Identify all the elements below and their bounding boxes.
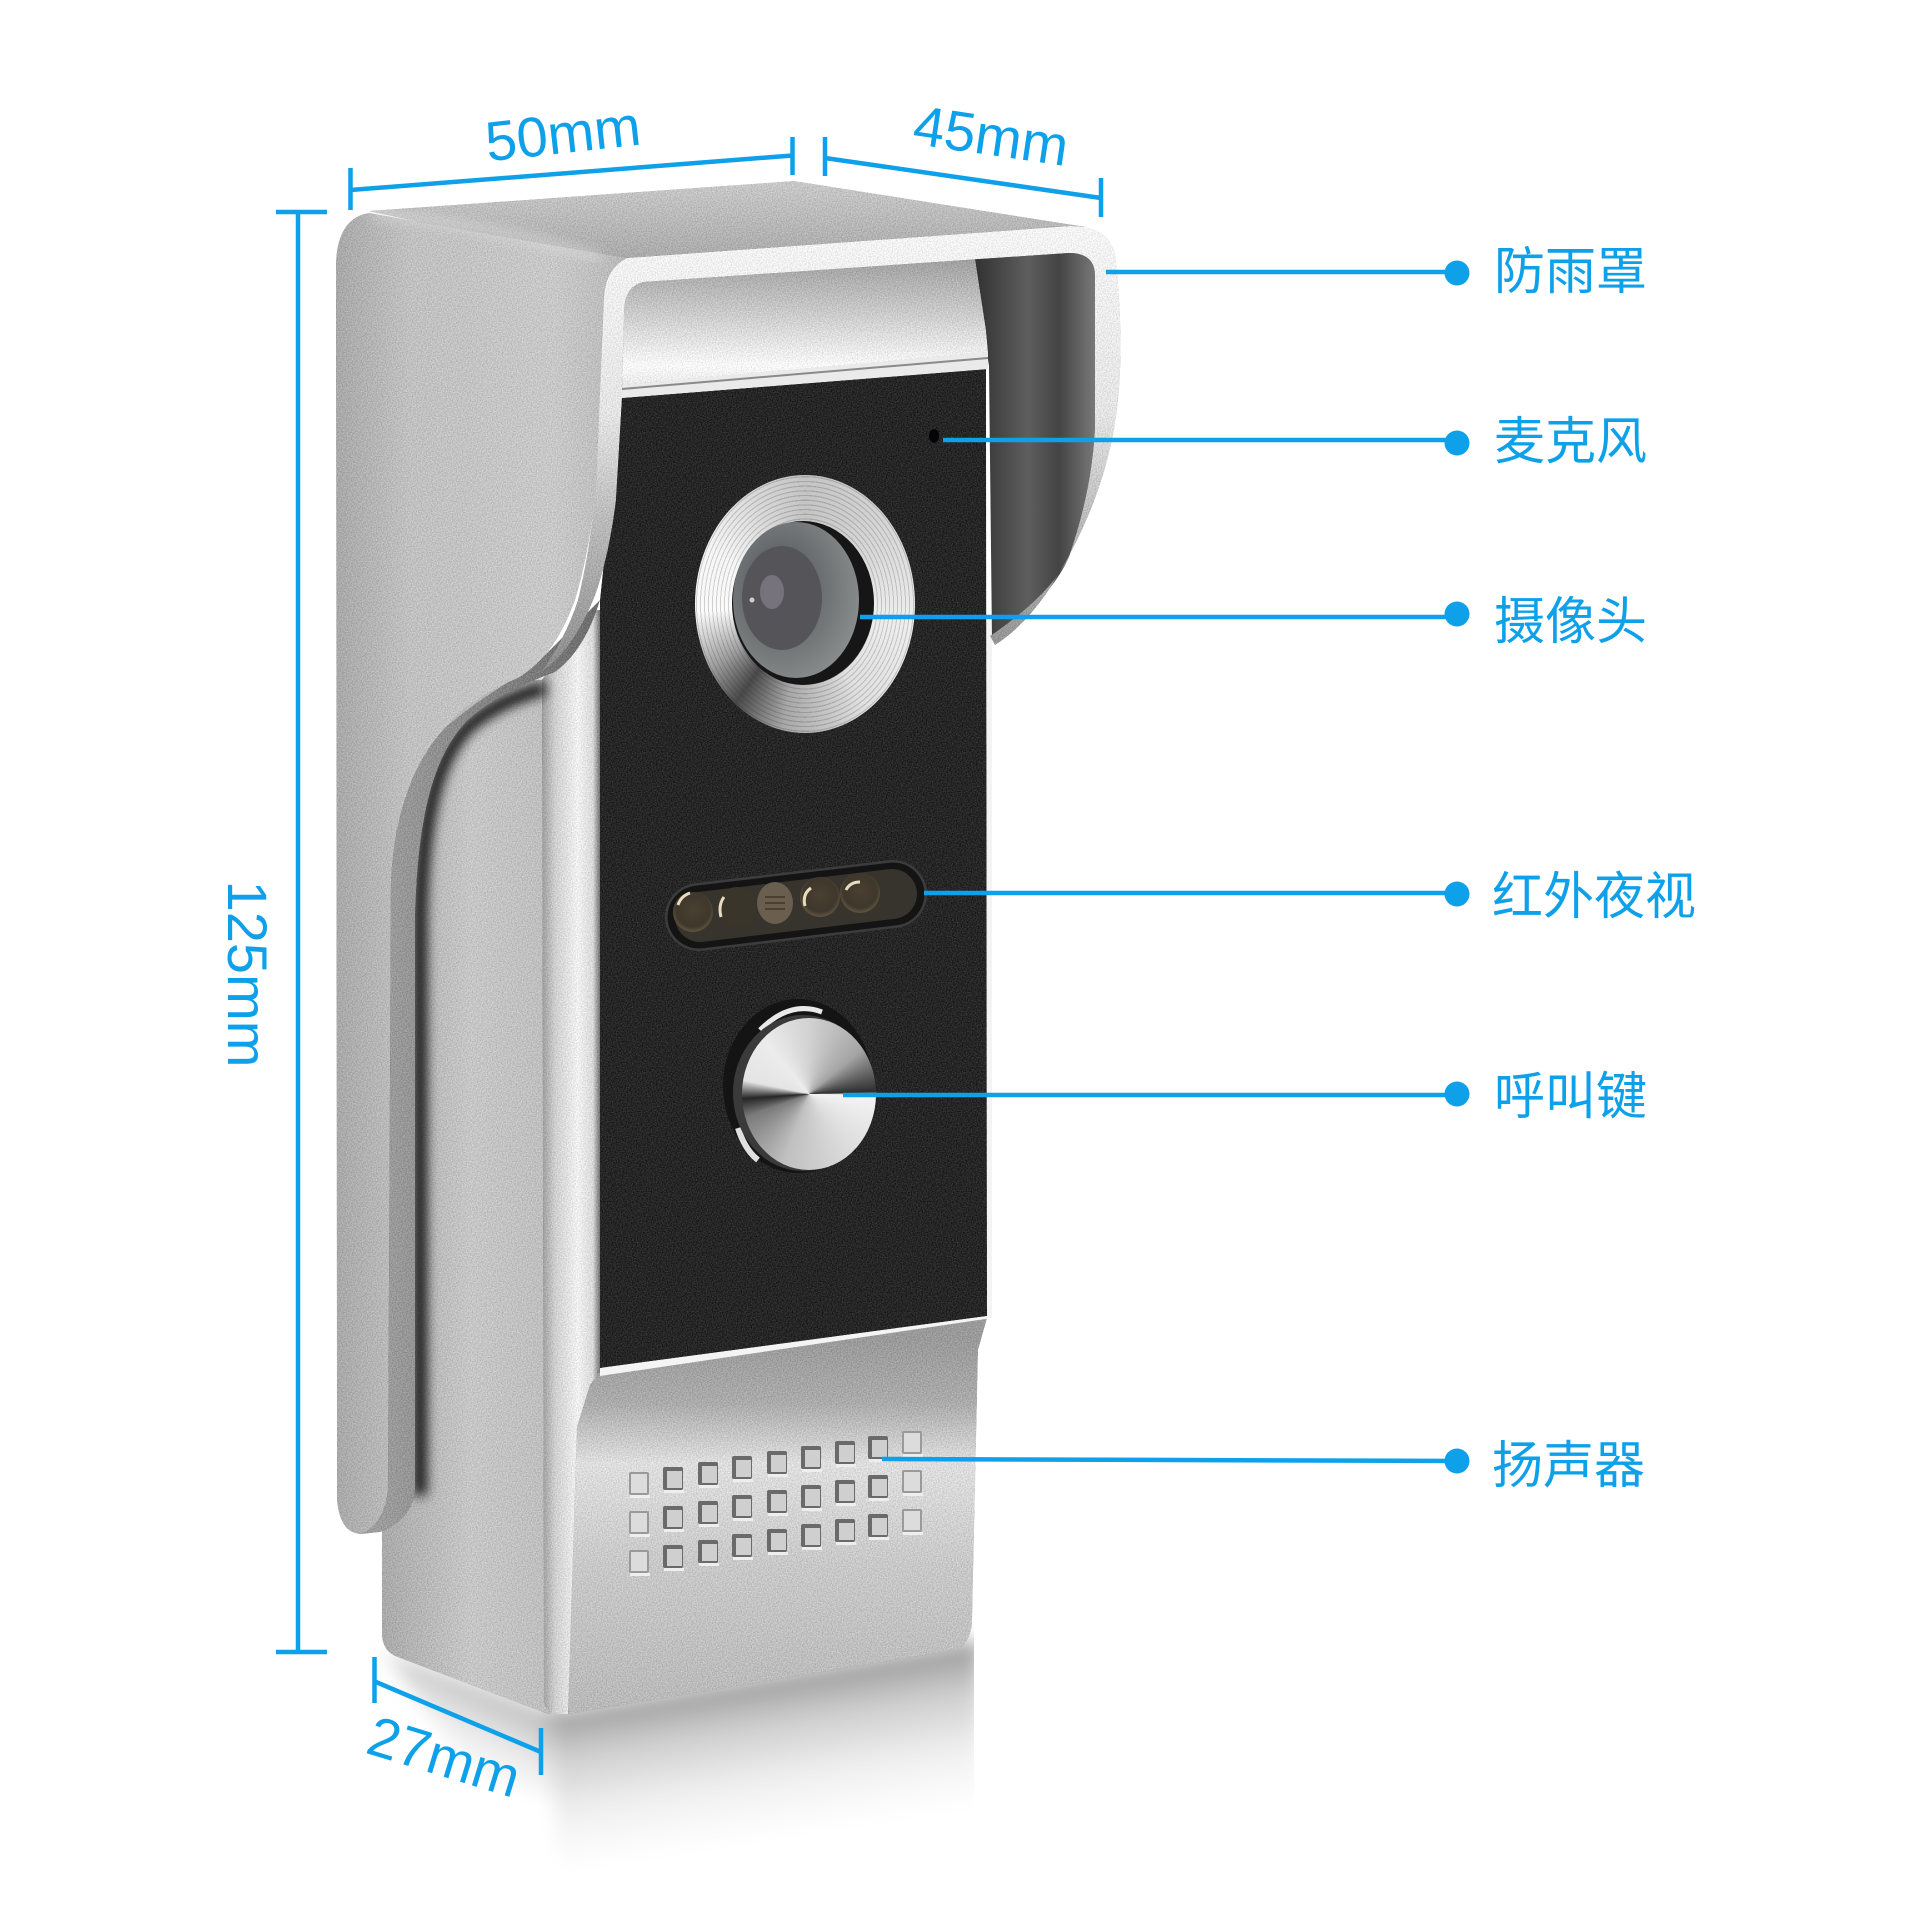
callout: speaker: 扬声器 [1492, 1437, 1645, 1494]
callout: rain hood: 防雨罩 [1494, 243, 1647, 300]
dimension: width 50mm: 50mm [482, 94, 644, 173]
dimension: height 125mm [216, 212, 327, 1652]
callout: camera: 摄像头 [1494, 593, 1647, 650]
speaker face [568, 1318, 987, 1714]
dimension: depth 45mm: 45mm [910, 93, 1073, 178]
callout: call button [843, 1068, 1647, 1125]
call button [723, 999, 876, 1173]
white panel edge [600, 620, 992, 1376]
body side face [381, 680, 560, 1714]
callout: call button: 呼叫键 [1494, 1068, 1647, 1125]
wing bevel [362, 600, 600, 1534]
callout: microphone [943, 413, 1647, 470]
doorbell device [336, 181, 1121, 1714]
LEDs [673, 873, 880, 932]
camera [695, 475, 915, 733]
callout: camera [860, 593, 1647, 650]
hood top surface [369, 181, 1086, 262]
callout: rain hood [1106, 243, 1647, 300]
silver under-hood surface [622, 258, 988, 385]
infrared window [673, 873, 893, 932]
microphone hole [929, 429, 939, 443]
silver strip above panel [621, 352, 988, 398]
ground shadow [386, 1630, 974, 1838]
hood front frame [540, 226, 1121, 673]
callout: infrared night vision: 红外夜视 [1492, 868, 1696, 925]
black front panel [600, 369, 987, 1368]
hood edge highlight [372, 214, 600, 258]
left side wing [336, 213, 627, 1534]
dimension: thickness 27mm: 27mm [361, 1704, 528, 1809]
callout: infrared night vision [924, 868, 1696, 925]
lens housing [732, 521, 874, 685]
dimension: width 50mm [350, 94, 792, 210]
callout: microphone: 麦克风 [1494, 413, 1647, 470]
shadow of left wing [420, 688, 545, 1495]
speaker grille [629, 1431, 923, 1576]
front strip [542, 610, 602, 1714]
button bezel [723, 999, 873, 1173]
dimension: thickness 27mm [361, 1657, 541, 1809]
hood inner dark wall [972, 250, 1096, 640]
camera ring [695, 475, 915, 733]
lens glass [733, 522, 859, 678]
dimension: height 125mm: 125mm [216, 881, 279, 1067]
callout: speaker [882, 1437, 1645, 1494]
button face [742, 1018, 876, 1170]
dimension: depth 45mm [825, 93, 1101, 217]
